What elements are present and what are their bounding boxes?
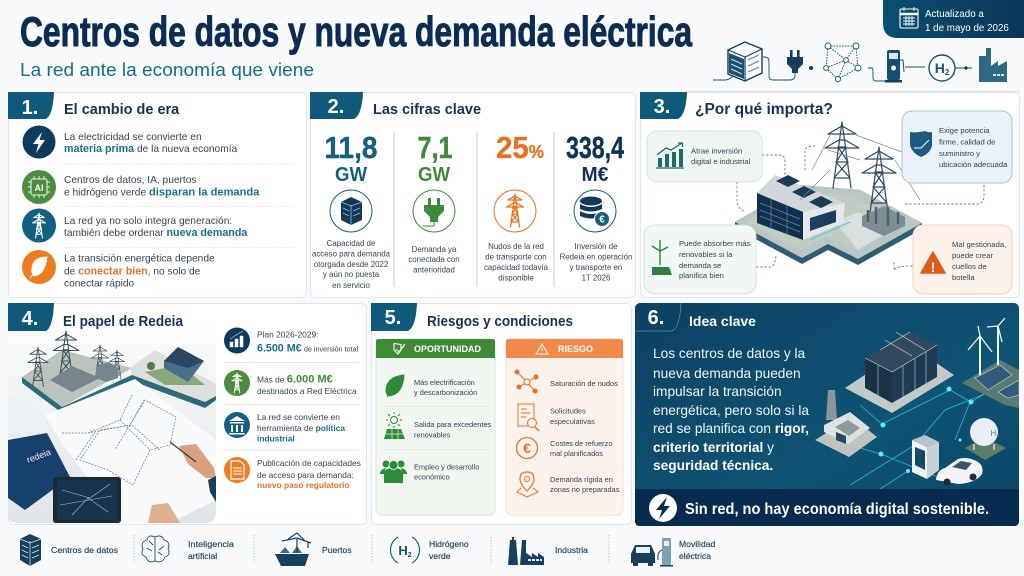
subtitle: La red ante la economía que viene	[20, 59, 314, 80]
item: publicación de capacidades: de acceso para demanda:	[257, 470, 354, 480]
section badge 5	[371, 303, 417, 331]
building platform	[130, 350, 216, 402]
stat: 338,4 M€	[560, 130, 632, 282]
item: industria	[508, 537, 588, 565]
section badge 1	[8, 92, 54, 119]
stat: 338,4 M€: Redeia en operación	[560, 252, 632, 262]
item: puertos: Puertos	[322, 545, 352, 555]
column: riesgo: RIESGO	[558, 344, 593, 354]
tablet	[53, 477, 121, 523]
row: conectar bien: conectar rápido	[64, 278, 135, 290]
icon: charger	[885, 50, 904, 82]
callout: exige potencia: Exige potencia	[939, 126, 990, 135]
row: materia prima: La electricidad se convierte en	[64, 132, 202, 143]
item: política industrial: herramienta de política	[257, 423, 345, 433]
heading: El cambio de era	[64, 102, 180, 118]
column: oportunidad	[376, 339, 495, 515]
row: conectar bien: de conectar bien, no solo de	[64, 266, 201, 278]
stat: 11,8 GW: Capacidad de	[327, 239, 376, 248]
section badge 5: 5.	[385, 307, 401, 329]
item: política industrial: La red se convierte en	[257, 412, 340, 422]
icon: hydrogen: H	[935, 60, 945, 76]
callout: cuellos de botella	[913, 225, 1012, 294]
row: disparan la demanda: Centros de datos, IA, puertos	[64, 175, 197, 186]
stat: 25%: capacidad todavía	[484, 263, 549, 272]
item: electrificación	[386, 375, 477, 397]
callout: absorber renovables	[644, 225, 756, 294]
item: inteligencia artificial: Inteligencia	[188, 539, 234, 549]
item: inteligencia artificial: artificial	[188, 551, 217, 561]
stat: 7,1 GW: GW	[418, 163, 451, 186]
stat: 7,1 GW	[408, 130, 460, 274]
icon: hydrogen	[929, 55, 955, 81]
hands	[179, 444, 216, 478]
stat: 338,4 M€: 338,4	[566, 130, 625, 165]
item: más de 6.000 M€	[224, 370, 357, 396]
item: solicitudes: especulativas	[550, 417, 595, 426]
body text: nueva demanda pueden	[653, 366, 801, 381]
callout: cuellos de botella: puede crear	[952, 251, 993, 260]
item: excedentes renovables: Salida para excedentes	[414, 420, 492, 429]
row: conectar bien	[22, 250, 215, 290]
body text: criterio territorial y	[653, 440, 774, 455]
item: excedentes renovables	[384, 412, 492, 440]
factory	[815, 390, 877, 457]
stat: 11,8 GW	[312, 130, 391, 290]
item: saturación	[514, 370, 618, 394]
icon: server	[728, 42, 762, 81]
item: empleo: económico	[414, 472, 450, 482]
section badge 3	[640, 92, 687, 119]
stat: 25%: 25%	[496, 130, 544, 165]
stat: 25%	[484, 130, 549, 282]
callout: cuellos de botella: !	[931, 259, 935, 275]
item: costes: Costes de refuerzo	[550, 439, 612, 448]
stat: 11,8 GW: acceso para demanda	[312, 250, 391, 258]
charging kiosk	[912, 435, 939, 479]
paper map	[45, 379, 216, 523]
column: oportunidad: OPORTUNIDAD	[414, 344, 481, 354]
item: empleo	[380, 460, 479, 483]
column: riesgo	[506, 339, 623, 515]
item: excedentes renovables: renovables	[414, 430, 450, 440]
callout: exige potencia	[902, 111, 1012, 183]
row: conectar bien: La transición energética depende	[64, 254, 215, 264]
panel: por qué importa	[640, 92, 1020, 298]
date badge	[883, 0, 1024, 38]
icon: calendar	[900, 7, 918, 28]
callout: exige potencia: suministro y	[939, 149, 980, 158]
item: electrificación: Más electrificación	[414, 378, 475, 387]
item: movilidad eléctrica: eléctrica	[679, 551, 711, 561]
item: publicación de capacidades: Publicación de capacidades	[257, 458, 361, 468]
notebook	[8, 433, 70, 510]
callout: cuellos de botella: Mal gestionada,	[952, 240, 1006, 249]
key message banner: Sin red, no hay economía digital sostenible.	[685, 501, 989, 518]
hydrogen tank	[965, 418, 1006, 460]
callout: absorber renovables: Puede absorber más	[679, 239, 751, 248]
key message banner	[635, 489, 1019, 526]
stat: 7,1 GW: anterioridad	[413, 266, 455, 274]
heading: Idea clave	[689, 313, 756, 329]
item: saturación: Saturación de nudos	[550, 379, 618, 388]
body text: impulsar la transición	[653, 384, 782, 399]
stat: 338,4 M€: Inversión de	[574, 242, 618, 251]
photo: map planning scene	[8, 319, 216, 523]
stat: 338,4 M€: y transporte en	[570, 263, 622, 272]
heading: Las cifras clave	[373, 102, 481, 118]
item: industria: Industria	[555, 545, 588, 555]
item: centros de datos: Centros de datos	[51, 545, 118, 555]
item: electrificación: y descarbonización	[414, 388, 477, 397]
substation platform	[22, 350, 132, 407]
item: hidrógeno verde: 2	[408, 552, 412, 559]
panel: riesgos y condiciones	[371, 303, 632, 524]
row: disparan la demanda: AI	[34, 183, 44, 193]
item: plan 2026-2029: 6.500 M€ de inversión total	[257, 342, 359, 354]
item: política industrial	[224, 412, 345, 444]
stat: 11,8 GW: otorgada desde 2022	[314, 260, 388, 269]
item: demanda rígida: zonas no preparadas	[550, 485, 620, 494]
body text: Los centros de datos y la	[653, 346, 806, 361]
stat: 338,4 M€: 1T 2026	[582, 274, 611, 282]
towers	[825, 122, 859, 188]
electric car	[936, 458, 982, 486]
stat: 11,8 GW: 11,8	[324, 130, 378, 165]
item: política industrial: industrial	[257, 434, 295, 444]
callout: exige potencia: firme, calidad de	[939, 138, 995, 146]
stat: 7,1 GW: conectada con	[408, 255, 460, 264]
wind and solar	[962, 318, 1019, 408]
item: costes: mal planificados	[550, 449, 603, 458]
icon: hydrogen: 2	[945, 68, 950, 77]
row: materia prima: materia prima de la nueva economía	[64, 143, 238, 155]
row: disparan la demanda	[22, 170, 260, 204]
illustration: data centre and substation	[735, 122, 922, 265]
row: nueva demanda: también debe ordenar nueva demanda	[64, 227, 248, 239]
item: inteligencia artificial	[142, 536, 234, 562]
panel: el papel de redeia	[8, 303, 366, 524]
row: disparan la demanda: e hidrógeno verde disparan la demanda	[64, 186, 260, 198]
section badge 6: 6.	[648, 307, 664, 329]
stat: 25%: de transporte con	[485, 252, 547, 262]
data centre	[845, 332, 954, 413]
item: centros de datos	[20, 534, 118, 566]
title: Centros de datos y nueva demanda eléctrica	[20, 8, 692, 55]
item: hidrógeno verde: H	[398, 543, 408, 558]
item: publicación de capacidades	[224, 457, 361, 490]
stat: 7,1 GW: Demanda ya	[412, 245, 457, 254]
hydrogen tank: H₂	[991, 429, 999, 438]
item: empleo: Empleo y desarrollo	[414, 462, 479, 472]
item: más de 6.000 M€: destinados a Red Eléctrica	[257, 386, 357, 396]
item: movilidad eléctrica	[631, 538, 716, 566]
stat: 11,8 GW: GW	[335, 163, 368, 186]
item: publicación de capacidades: nuevo paso regulatorio	[257, 480, 350, 490]
heading: El papel de Redeia	[63, 313, 184, 330]
callout: atrae inversión: Atrae inversión	[691, 146, 742, 156]
body text: red se planifica con rigor,	[653, 421, 809, 436]
date badge: 1 de mayo de 2026	[925, 23, 1009, 34]
section badge 4	[8, 303, 54, 331]
item: movilidad eléctrica: Movilidad	[679, 539, 716, 549]
callout: atrae inversión	[647, 131, 762, 182]
item: solicitudes: Solicitudes	[550, 406, 586, 416]
item: demanda rígida	[517, 472, 620, 497]
panel: las cifras clave	[310, 92, 636, 298]
section badge 3: 3.	[654, 96, 670, 118]
body text: seguridad técnica.	[653, 458, 773, 473]
notebook: redeia	[25, 447, 52, 465]
item: hidrógeno verde	[390, 537, 469, 563]
stat: 25%: disponible	[498, 274, 534, 282]
footer sector legend	[20, 533, 716, 566]
stat: 11,8 GW: en servicio	[332, 281, 370, 290]
body text: energética, pero solo si la	[653, 403, 809, 418]
body text	[653, 346, 809, 473]
icon: factory	[979, 48, 1007, 82]
section badge 6	[635, 303, 681, 331]
heading: ¿Por qué importa?	[695, 101, 833, 118]
row: nueva demanda: La red ya no solo integra generación:	[64, 216, 232, 227]
item: costes	[516, 438, 612, 458]
stat: 7,1 GW: 7,1	[418, 130, 452, 165]
callout: cuellos de botella: botella	[952, 273, 975, 282]
callout: exige potencia: ubicación adecuada	[939, 160, 1008, 169]
row: materia prima	[22, 126, 238, 158]
callout: atrae inversión: digital e industrial	[691, 157, 751, 166]
date badge: Actualizado a	[925, 9, 984, 20]
section badge 4: 4.	[22, 308, 38, 330]
icon: network	[824, 43, 861, 82]
callout: absorber renovables: demanda se	[679, 261, 721, 270]
section badge 2	[310, 92, 363, 119]
row: nueva demanda	[22, 208, 248, 242]
item: solicitudes	[518, 404, 595, 431]
stat: 11,8 GW: y aún no puesta	[323, 270, 380, 279]
item: plan 2026-2029: Plan 2026-2029:	[257, 330, 318, 340]
section badge 2: 2.	[328, 96, 344, 118]
callout: absorber renovables: renovables si la	[679, 250, 733, 259]
callout: cuellos de botella: cuellos de	[952, 262, 987, 271]
section badge 1: 1.	[22, 97, 38, 119]
icon: plug	[787, 50, 803, 73]
item: hidrógeno verde: verde	[429, 551, 451, 561]
callout: absorber renovables: planifica bien	[679, 271, 724, 280]
item: costes: €	[523, 440, 531, 456]
item: puertos	[275, 533, 352, 566]
item: plan 2026-2029	[224, 328, 359, 354]
heading: Riesgos y condiciones	[427, 313, 573, 330]
item: demanda rígida: Demanda rígida en	[550, 475, 613, 484]
building	[757, 175, 845, 240]
item: hidrógeno verde: Hidrógeno	[429, 539, 469, 549]
panel: idea clave	[635, 303, 1019, 526]
illustration: connected infrastructure	[815, 318, 1019, 489]
stat: 338,4 M€: €	[599, 214, 605, 226]
stat: 25%: Nudos de la red	[488, 242, 544, 251]
stat: 338,4 M€: M€	[582, 163, 609, 186]
panel: el cambio de era	[8, 92, 306, 298]
header icon strip	[713, 42, 1007, 82]
item: más de 6.000 M€: Más de 6.000 M€	[257, 374, 333, 386]
